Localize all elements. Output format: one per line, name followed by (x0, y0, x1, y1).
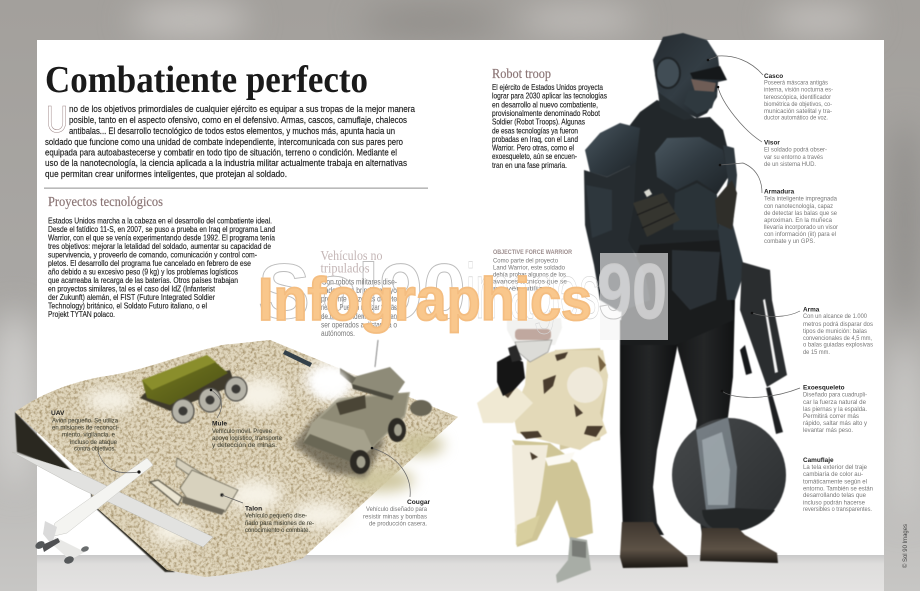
text block: Proyectos tecnológicos: der Zukunft) alemán, el FIST (Future Integrated Soldier (48, 293, 215, 302)
intro paragraph: antibalas... El desarrollo tecnológico de todos estos elementos, y muchos más, apunta hacia un (69, 126, 395, 136)
callout: Casco: tereoscópica, identificador (764, 94, 832, 101)
callout: Casco: municación satelital y tra- (764, 108, 832, 115)
text block: Objective Force Warrior: Como parte del proyecto (493, 258, 558, 264)
heading: Vehículos no tripulados: tripulados (320, 262, 370, 276)
patch (644, 189, 652, 197)
caption: Talon: Talon (245, 506, 262, 512)
callout: Casco: biométrica de objetivos, co- (764, 101, 832, 108)
vehicle: Talon (150, 458, 238, 515)
diorama: desert terrain block (15, 340, 458, 577)
intro paragraph: uso de la nanotecnología, la ciencia aplicada a la industria militar actualmente trabaja en alternativas (45, 158, 407, 168)
text block: Vehículos no tripulados: de tropas. Además, pueden (321, 312, 397, 321)
left pouches (633, 193, 680, 237)
text block: Proyectos tecnológicos: Warrior, con el que se venía experimentando desde 1992. El programa tenía (48, 234, 276, 242)
camouflage blotches (502, 352, 606, 460)
watermark: Sol90 (258, 247, 466, 335)
text block: Vehículos no tripulados: ñados para brindar apoyo (321, 286, 398, 295)
rocket-like object on the terrain (283, 350, 312, 367)
caption: Cougar: resistir minas y bombas (363, 513, 428, 520)
legs (512, 440, 593, 547)
text block: Objective Force Warrior: avances técnicos que se (493, 278, 567, 286)
pelvis and thigh (620, 240, 734, 345)
credit: © Sol 90 Images (901, 523, 909, 568)
callout: Exoesqueleto: las piernas y la espalda. (803, 406, 867, 413)
callout: Visor: var su entorno a través (764, 154, 824, 161)
watermark: Infographics (258, 266, 592, 333)
callout: Arma: Arma (803, 306, 820, 314)
torso base (627, 100, 733, 310)
callout: Camuflaje: La tela exterior del traje (803, 464, 867, 471)
callout: Armadura: llevaría incorporado un visor (764, 224, 839, 231)
text block: Robot troop: Soldier (Robot Troops). Algunas (492, 118, 585, 127)
intro paragraph: no de los objetivos primordiales de cualquier ejército es equipar a sus tropas de la mejor manera (69, 104, 415, 114)
heading: Robot troop: Robot troop (492, 67, 551, 82)
callout: Arma: Con un alcance de 1.000 (803, 313, 867, 320)
callout: Arma: de 15 mm. (803, 349, 830, 356)
right boot (700, 528, 778, 563)
text block: Proyectos tecnológicos: Desde el fatídico 11-S, en 2007, se puso a prueba en Iraq el programa Land (48, 225, 275, 234)
text block: Vehículos no tripulados (321, 278, 398, 338)
caption: Mule: y detección de minas. (212, 442, 277, 449)
watermark: images (466, 247, 600, 335)
intro paragraph (45, 99, 415, 179)
title: Combatiente perfecto (45, 59, 368, 101)
caption: Mule (212, 420, 282, 449)
Cougar turret (350, 367, 405, 400)
text block: Vehículos no tripulados: Son robots militares dise- (322, 278, 397, 286)
text block: Proyectos tecnológicos: año debido a su excesivo peso (9 kg) y los problemas logísticos (48, 268, 238, 276)
text block: Robot troop: en desarrollo al nuevo combatiente, (492, 100, 598, 109)
caption: UAV (51, 410, 119, 452)
right arm (718, 145, 745, 300)
torso (513, 350, 608, 450)
text block: Robot troop: probadas en Iraq, con el Land (492, 135, 578, 144)
text block: Proyectos tecnológicos: supervivencia, y proveerlo de comando, comunicación y control com- (48, 250, 257, 260)
boot (556, 537, 591, 583)
callout: Armadura: aproximan. En la muñeca (764, 217, 832, 224)
text block: Objective Force Warrior: Land Warrior, este soldado (493, 264, 565, 272)
callout: Camuflaje (803, 457, 873, 513)
text block: Objective Force Warrior: prevén utilizar. (493, 286, 553, 292)
caption: UAV: en misiones de reconoci- (52, 424, 119, 431)
caption: Cougar: de producción casera. (369, 520, 427, 527)
callout: Armadura (764, 188, 839, 245)
text block: Robot troop: de esas tecnologías ya fueron (492, 126, 578, 135)
goggles (515, 329, 551, 340)
callout: Visor: Visor (764, 140, 780, 146)
leader lines and anchor dots (98, 56, 800, 503)
neck armour (658, 92, 695, 120)
rifle (740, 262, 787, 434)
backpack (555, 348, 608, 450)
camouflage disc (672, 417, 786, 532)
callout: Armadura: con información (iit) para el (764, 231, 836, 238)
callout: Arma: convencionales de 4,5 mm, (803, 335, 872, 342)
left arm (584, 163, 650, 312)
face opening (691, 79, 716, 92)
caption: Mule: Vehículo móvil. Provee (212, 428, 272, 435)
caption: UAV: incluso de ataque (70, 439, 117, 446)
text block: Proyectos tecnológicos: tres objetivos: mejorar la letalidad del soldado, aumentar su capacidad de (48, 242, 271, 251)
intro paragraph: soldado que funcione como una unidad de combate independiente, intercomunicada con sus pares pero (45, 137, 403, 147)
callout: Armadura: con nanotecnología, capaz (764, 203, 833, 210)
callout: Casco: Casco (764, 73, 783, 80)
callout: Armadura: de detectar las balas que se (764, 210, 837, 217)
callout: Camuflaje: incluso podrán hacerse (803, 500, 865, 506)
callout: Exoesqueleto: levantar más peso. (803, 427, 853, 434)
text block: Vehículos no tripulados: autónomos. (321, 329, 355, 338)
text block: Vehículos no tripulados: ser operados a distancia o (321, 320, 398, 330)
text block: Proyectos tecnológicos (48, 216, 276, 319)
callout: Camuflaje: reversibles o transparentes. (803, 506, 872, 513)
text block: Proyectos tecnológicos: Estados Unidos marcha a la cabeza en el desarrollo del combatiente ideal. (48, 216, 272, 226)
right leg (670, 300, 738, 535)
text block: Robot troop: provisionalmente denominado Robot (492, 109, 601, 118)
text block: Proyectos tecnológicos: que acarreaba la recarga de las baterías. Otros países trabajan (48, 276, 238, 285)
terrain surface (15, 340, 458, 577)
watermark (258, 247, 668, 340)
text block: Proyectos tecnológicos: Technology) británico, el Soldato Futuro italiano, o el (48, 302, 207, 310)
callout: Armadura: combate y un GPS. (764, 238, 815, 245)
chest plate (655, 137, 728, 193)
callout: Exoesqueleto (803, 384, 868, 434)
callout: Visor: de un sistema HUD. (764, 161, 816, 168)
helmet (653, 33, 727, 118)
text block: Vehículos no tripulados: presente en zonas de alto (321, 294, 398, 304)
caption: Cougar: Vehículo diseñado para (366, 506, 427, 513)
left leg (620, 320, 678, 535)
callout: Camuflaje: cambiaría de color au- (803, 471, 863, 478)
gloves and weapon (497, 355, 525, 396)
text block: Proyectos tecnológicos: en proyectos similares, tal es el caso del IdZ (Infanterist (48, 284, 216, 294)
caption: UAV: contra objetivos. (74, 445, 116, 452)
caption: Mule: Mule (212, 420, 227, 428)
section heading: Proyectos tecnológicos: Proyectos tecnológicos (48, 194, 163, 209)
visor (684, 90, 717, 114)
drop cap U: U (46, 99, 68, 141)
text block: Robot troop: tran en una fase primaria. (492, 161, 567, 170)
abdomen plate (673, 183, 718, 230)
callout: Exoesqueleto: Exoesqueleto (803, 384, 845, 392)
vehicle: Cougar (293, 340, 432, 478)
callout: Arma: tipos de munición: balas (803, 328, 868, 335)
caption: Mule: apoyo logístico, transporte (212, 435, 282, 442)
left shoulder (585, 123, 640, 177)
caption: UAV: UAV (51, 410, 65, 417)
caption: UAV: Avión pequeño. Se utiliza (52, 417, 118, 424)
terrain pale patches (84, 362, 444, 544)
helmet (507, 318, 562, 345)
callout: Camuflaje: entorno. También se están (803, 486, 873, 492)
small soldier: Objective Force Warrior (477, 318, 608, 583)
heading: Vehículos no tripulados: Vehículos no (320, 249, 382, 264)
bottom floor band (37, 555, 884, 591)
vehicle: UAV drone (12, 452, 213, 565)
text block: Objective Force Warrior: OBJECTIVE FORCE WARRIOR (493, 250, 573, 256)
caption: Talon: Vehículo pequeño dise- (245, 513, 307, 520)
callout: Casco: interna, visión nocturna es- (764, 86, 833, 94)
text block: Objective Force Warrior (493, 250, 573, 292)
intro paragraph: equipada para autoabastecerse y combatir en todo tipo de situación, terreno o condición. Mediante el (45, 148, 397, 158)
watermark: 90 (597, 247, 667, 335)
callout: Exoesqueleto: Permitirá correr más (803, 413, 860, 420)
intro paragraph: que permitan crear uniformes inteligentes, que protejan al soldado. (45, 169, 287, 179)
text block: Vehículos no tripulados: riesgo. Pueden realizar tareas (321, 303, 397, 312)
heading: Vehículos no tripulados (320, 249, 382, 276)
callout: Exoesqueleto: Diseñado para cuadrupli- (803, 392, 867, 398)
callout: Armadura: Armadura (764, 188, 795, 196)
caption: Talon: conocimiento o combate. (245, 527, 310, 534)
mask (515, 340, 552, 362)
caption: Cougar: Cougar (407, 499, 431, 506)
shoulder patch (567, 367, 603, 403)
callout: Camuflaje: desarrollando telas que (803, 492, 866, 499)
UAV fuselage (50, 458, 153, 537)
caption: Talon (245, 506, 314, 534)
left arm (477, 380, 533, 423)
text block: Proyectos tecnológicos: Projekt TYTAN polaco. (48, 310, 115, 319)
callout: Exoesqueleto: rápido, saltar más alto y (803, 420, 868, 427)
callout: Exoesqueleto: car la fuerza natural de (803, 399, 866, 406)
caption: UAV: miento, vigilancia, e (62, 431, 115, 438)
callout: Casco: ductor automático de voz. (764, 114, 828, 122)
callout: Casco: Poseerá máscara antigás (764, 80, 829, 86)
helmet ear cup (656, 58, 680, 88)
UAV main wing (12, 452, 213, 547)
callout: Camuflaje: tomáticamente según el (803, 478, 867, 486)
callout: Arma: metros podrá disparar dos (803, 321, 874, 328)
text block: Robot troop: exoesqueleto, aún se encuen- (492, 152, 577, 161)
text block: Robot troop: lograr para 2030 aplicar las tecnologías (492, 92, 607, 101)
callout: Arma: o balas guiadas explosivas (803, 342, 874, 348)
text block: Proyectos tecnológicos: pletos. El desarrollo del programa fue cancelado en febrero de ese (48, 259, 251, 268)
text block: Robot troop: El ejército de Estados Unidos proyecta (492, 83, 604, 92)
right pouches (715, 180, 737, 230)
text block: Robot troop (492, 83, 607, 170)
callout: Camuflaje: Camuflaje (803, 457, 834, 464)
callout: Armadura: Tela inteligente impregnada (764, 196, 837, 202)
big soldier: Land Warrior future combatant (584, 33, 787, 568)
callout: Visor (764, 140, 827, 168)
callout: Arma (803, 306, 874, 356)
helmet brim (690, 66, 727, 80)
vehicle: Mule (140, 355, 247, 423)
callout: Casco (764, 73, 833, 122)
caption: Talon: ñado para misiones de re- (245, 520, 314, 527)
left boot (620, 522, 688, 568)
watermark translucent box (600, 253, 668, 340)
text block: Robot troop: Warrior. Pero otras, como el (492, 144, 574, 153)
text block: Objective Force Warrior: debía probar algunos de los (493, 272, 567, 278)
intro paragraph: posible, tanto en el aspecto ofensivo, como en el defensivo. Armas, cascos, camuflaje, chalecos (69, 115, 407, 125)
caption: Cougar (363, 499, 431, 527)
UAV tail (43, 521, 57, 545)
terrain side (dark cliff) (15, 412, 175, 572)
callout: Visor: El soldado podrá obser- (764, 146, 827, 154)
